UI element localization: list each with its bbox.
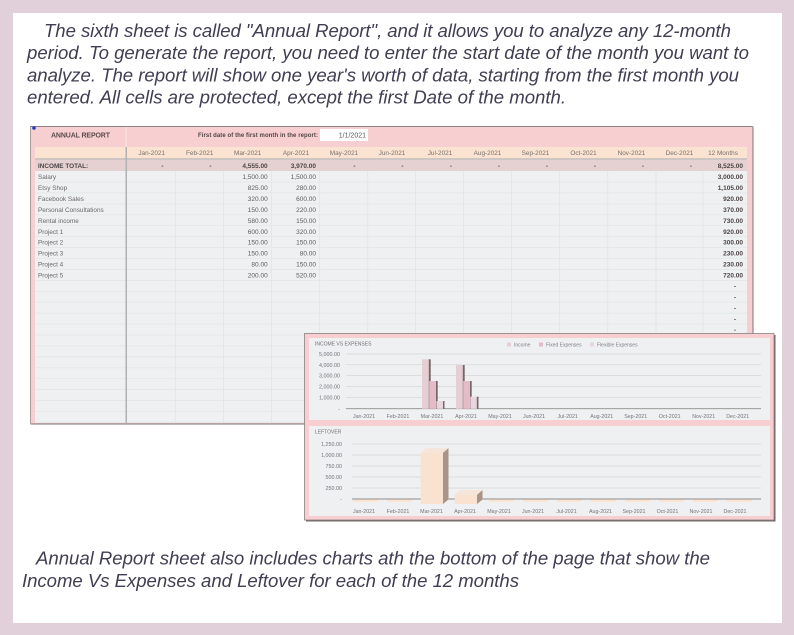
chart legend: Income (514, 342, 531, 348)
chart: income vs expenses: Nov-2021 (692, 414, 715, 420)
bar: April leftover (455, 490, 482, 504)
bar: March leftover (421, 448, 448, 504)
month header row: Aug-2021 (474, 150, 502, 157)
chart: income vs expenses: Dec-2021 (726, 414, 749, 420)
panel: annual report spreadsheet (30, 126, 754, 424)
income total row: - (401, 163, 404, 170)
income total row: - (353, 163, 356, 170)
income total row: - (642, 163, 644, 170)
income total row: - (450, 163, 452, 170)
start date input (320, 129, 368, 141)
income rows: 300.00 (723, 240, 743, 247)
chart: income vs expenses: Oct-2021 (659, 414, 681, 420)
intro text block (26, 20, 749, 108)
month header row: 12 Months (708, 150, 738, 157)
income total row: - (690, 163, 692, 170)
income rows: 520.00 (296, 272, 316, 280)
chart: income vs expenses: 1,000.00 (319, 396, 340, 402)
bars: March (422, 359, 444, 409)
chart: leftover: Dec-2021 (724, 509, 747, 515)
income rows: 80.00 (251, 262, 268, 269)
income rows: 150.00 (296, 218, 316, 225)
income rows: - (734, 284, 736, 290)
sheet title: ANNUAL REPORT (51, 132, 111, 140)
income rows: Project 3 (38, 251, 64, 258)
income rows: 600.00 (296, 196, 316, 203)
income rows: 320.00 (248, 196, 268, 203)
chart: leftover: 1,250.00 (321, 442, 342, 448)
income rows: Salary (38, 174, 57, 181)
chart: leftover: Mar-2021 (420, 509, 443, 515)
income total row: 4,555.00 (242, 163, 268, 170)
income rows: 730.00 (723, 218, 743, 225)
income rows: - (734, 294, 736, 301)
chart: leftover: 750.00 (326, 464, 342, 470)
chart: leftover (309, 426, 770, 516)
chart: income vs expenses: 4,000.00 (319, 363, 340, 369)
chart: income vs expenses: Jul-2021 (558, 414, 578, 420)
income rows: Project 5 (38, 272, 64, 280)
income rows: 280.00 (296, 185, 316, 192)
chart: income vs expenses: Aug-2021 (590, 414, 613, 420)
income rows: 230.00 (723, 262, 743, 269)
income total row (35, 160, 747, 171)
chart: income vs expenses: May-2021 (488, 414, 512, 420)
chart: income vs expenses: Jan-2021 (353, 414, 375, 420)
month header row: Jun-2021 (379, 150, 406, 157)
intro text block: analyze. The report will show one year's worth of data, starting from the first month you (27, 64, 739, 86)
chart: leftover: 500.00 (326, 475, 342, 481)
chart: leftover: 1,000.00 (321, 453, 342, 459)
chart: income vs expenses: Sep-2021 (624, 414, 647, 420)
panel: charts overlay (304, 334, 776, 522)
income rows: 150.00 (296, 240, 316, 247)
month header row: Jul-2021 (428, 150, 453, 157)
income total row: INCOME TOTAL: (38, 163, 88, 170)
chart: leftover: Nov-2021 (690, 509, 713, 515)
income rows: 580.00 (248, 218, 268, 225)
chart: leftover: - (340, 497, 342, 503)
month header row: Apr-2021 (283, 150, 310, 157)
chart: income vs expenses (309, 338, 770, 420)
month header row: Jan-2021 (138, 150, 165, 157)
intro text block: entered. All cells are protected, except the first Date of the month. (27, 86, 566, 108)
chart: income vs expenses: - (338, 407, 340, 413)
chart: leftover: Jan-2021 (353, 509, 375, 515)
income total row: 3,970.00 (291, 163, 316, 170)
month header row: Sep-2021 (522, 150, 550, 157)
income total row: - (209, 163, 212, 170)
icon: blue selection marker (32, 126, 36, 130)
income total row: - (546, 163, 548, 170)
income rows: 320.00 (296, 229, 316, 236)
income rows: - (734, 305, 736, 312)
income rows: 150.00 (248, 240, 268, 247)
month header row (35, 147, 747, 160)
month header row: Nov-2021 (618, 150, 646, 157)
income rows: 1,105.00 (718, 185, 743, 192)
income rows: 370.00 (723, 207, 743, 214)
income rows: 1,500.00 (291, 174, 316, 181)
income rows (38, 174, 743, 334)
month header row: Mar-2021 (234, 150, 262, 157)
income total row: - (161, 163, 164, 170)
chart: leftover: Feb-2021 (387, 509, 409, 515)
income rows: 150.00 (248, 251, 268, 258)
income rows: 920.00 (723, 196, 743, 203)
start date label: First date of the first month in the report: (198, 133, 318, 139)
closing text block (22, 548, 710, 591)
income total row: 8,525.00 (718, 163, 743, 170)
income total row: - (498, 163, 500, 170)
month header row: May-2021 (330, 150, 359, 157)
income rows: Personal Consultations (38, 207, 104, 214)
month header row: Oct-2021 (570, 150, 597, 157)
chart: leftover: Aug-2021 (589, 509, 612, 515)
chart: leftover: 250.00 (326, 486, 342, 492)
chart: leftover: Sep-2021 (623, 509, 646, 515)
chart: leftover: Apr-2021 (454, 509, 476, 515)
chart legend: Fixed Expenses (546, 342, 582, 348)
chart: income vs expenses: Feb-2021 (387, 414, 409, 420)
income rows: 150.00 (248, 207, 268, 214)
month header row: Dec-2021 (666, 150, 694, 157)
income rows: 600.00 (248, 229, 268, 236)
chart: income vs expenses: Mar-2021 (421, 414, 443, 420)
chart: income vs expenses: 2,000.00 (319, 385, 340, 391)
income rows: 920.00 (723, 229, 743, 236)
income rows: Facebook Sales (38, 196, 84, 203)
income rows: 1,500.00 (242, 174, 268, 181)
income rows: - (734, 316, 736, 323)
income rows: Project 2 (38, 240, 64, 247)
chart: leftover: May-2021 (487, 509, 511, 515)
month header row: Feb-2021 (186, 150, 214, 157)
income rows: Rental income (38, 218, 79, 225)
start date input: 1/1/2021 (339, 132, 366, 140)
closing text block: Annual Report sheet also includes charts ath the bottom of the page that show the (35, 548, 710, 568)
chart: leftover: Oct-2021 (657, 509, 678, 515)
closing text block: Income Vs Expenses and Leftover for each of the 12 months (22, 570, 519, 591)
chart: leftover: Jun-2021 (522, 509, 544, 515)
income rows: Etsy Shop (38, 185, 68, 192)
bars: April (456, 365, 478, 409)
chart: income vs expenses: Apr-2021 (455, 414, 477, 420)
chart: leftover: LEFTOVER (315, 430, 342, 436)
intro text block: period. To generate the report, you need to enter the start date of the month you want to (26, 42, 749, 63)
income rows: 80.00 (300, 251, 316, 258)
income rows: 220.00 (296, 207, 316, 214)
chart: income vs expenses: 3,000.00 (319, 374, 340, 380)
intro text block: The sixth sheet is called "Annual Report", and it allows you to analyze any 12-month (44, 20, 731, 41)
chart: leftover: Jul-2021 (556, 509, 577, 515)
income rows: Project 1 (38, 229, 64, 236)
income rows: 825.00 (248, 185, 268, 192)
chart legend (507, 342, 638, 348)
chart: income vs expenses: INCOME VS EXPENSES (315, 342, 372, 348)
income rows: 150.00 (296, 262, 316, 269)
chart: income vs expenses: 5,000.00 (319, 352, 340, 358)
income rows: - (734, 327, 736, 334)
income rows: 3,000.00 (718, 174, 743, 181)
income rows: 230.00 (723, 251, 743, 258)
chart: income vs expenses: Jun-2021 (523, 414, 545, 420)
income total row: - (594, 163, 596, 170)
income rows: Project 4 (38, 262, 64, 269)
income rows: 720.00 (723, 272, 743, 280)
income rows: 200.00 (248, 272, 268, 280)
chart legend: Flexible Expenses (597, 342, 638, 348)
